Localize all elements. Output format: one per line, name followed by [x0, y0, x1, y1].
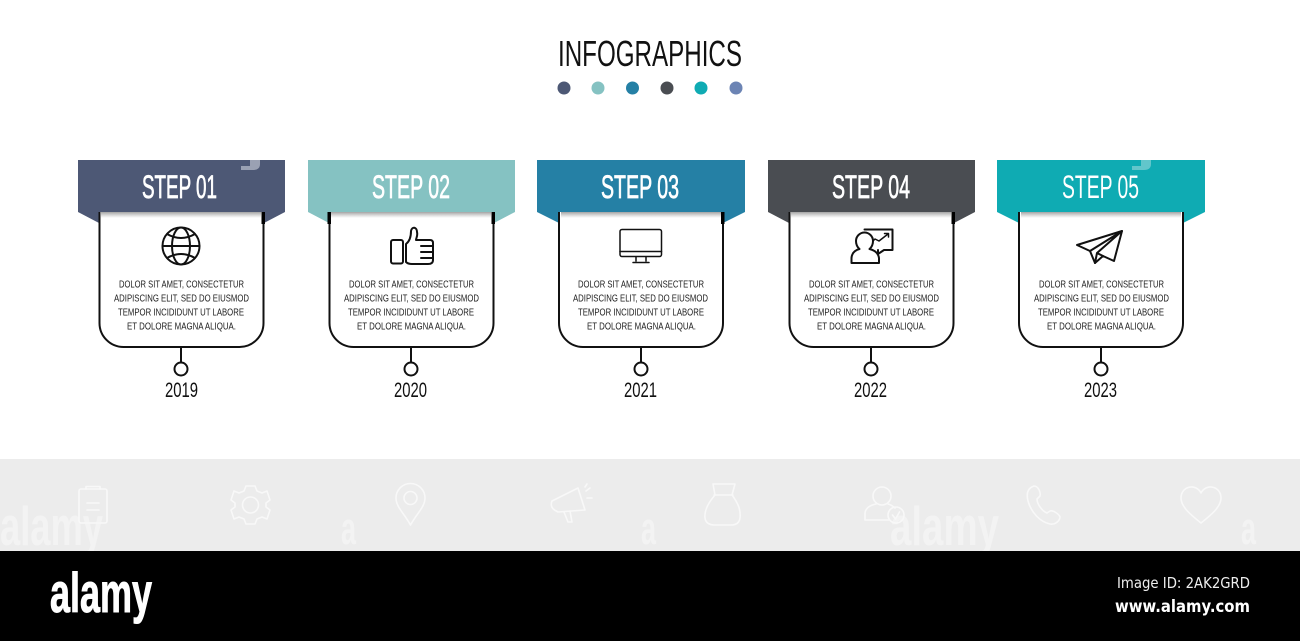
card tabs	[262, 212, 265, 224]
body text: ET DOLORE MAGNA ALIQUA.	[817, 322, 926, 332]
body text: ET DOLORE MAGNA ALIQUA.	[357, 322, 466, 332]
timeline marker	[1094, 347, 1108, 376]
header banner: step 02	[308, 160, 515, 223]
panel: step 03	[537, 160, 745, 402]
body text: ADIPISCING ELIT, SED DO EIUSMOD	[114, 294, 249, 304]
card background: step 05	[1019, 212, 1183, 347]
timeline marker	[174, 347, 188, 376]
body text: ET DOLORE MAGNA ALIQUA.	[127, 322, 236, 332]
logo: alamy: alamy	[50, 561, 152, 624]
card outline: step 05	[1019, 212, 1183, 347]
header banner: step 04	[768, 160, 975, 223]
panel: black footer bar	[0, 551, 1300, 641]
year: 2021	[624, 379, 657, 402]
body text: ADIPISCING ELIT, SED DO EIUSMOD	[1034, 294, 1169, 304]
icon: location pin	[396, 483, 425, 525]
card tabs	[721, 212, 724, 224]
body text	[573, 280, 708, 332]
watermark: alamy left: alamy	[0, 495, 103, 557]
body text: DOLOR SIT AMET, CONSECTETUR	[578, 280, 704, 290]
year: 2022	[854, 379, 887, 402]
body text: ADIPISCING ELIT, SED DO EIUSMOD	[804, 294, 939, 304]
body text: TEMPOR INCIDIDUNT UT LABORE	[808, 308, 934, 318]
card tabs	[328, 212, 495, 224]
image id: Image ID: 2AK2GRD	[1117, 574, 1250, 592]
body text: DOLOR SIT AMET, CONSECTETUR	[349, 280, 474, 290]
panel: step 05	[997, 160, 1205, 402]
heading: step 01: STEP 01	[142, 169, 217, 205]
panel: grey icon band	[0, 459, 1300, 557]
card shadow	[331, 212, 492, 218]
panel: step 02	[308, 160, 515, 402]
icon: presenter with chart	[852, 230, 892, 263]
card shadow	[1021, 212, 1181, 218]
heading: step 05: STEP 05	[1062, 169, 1139, 205]
card background: step 04	[790, 212, 954, 347]
card tabs	[952, 212, 955, 224]
colour dots	[558, 82, 742, 94]
watermark: a: a	[641, 503, 657, 554]
icon: thumbs up	[391, 228, 433, 264]
icon: clipboard	[79, 486, 107, 523]
body text: DOLOR SIT AMET, CONSECTETUR	[1039, 280, 1164, 290]
body text: TEMPOR INCIDIDUNT UT LABORE	[348, 308, 474, 318]
heading: step 04: STEP 04	[832, 169, 910, 205]
icon: megaphone	[551, 484, 592, 522]
icon: money bag	[705, 484, 740, 525]
body text: ET DOLORE MAGNA ALIQUA.	[587, 322, 696, 332]
body text: ADIPISCING ELIT, SED DO EIUSMOD	[344, 294, 479, 304]
header banner: step 03	[537, 160, 745, 223]
icon: monitor	[620, 230, 662, 262]
panel: step 01	[78, 160, 285, 402]
card shadow	[561, 212, 721, 218]
body text	[804, 280, 939, 332]
card outline: step 02	[330, 212, 494, 347]
body text	[1034, 280, 1169, 332]
body text: ADIPISCING ELIT, SED DO EIUSMOD	[573, 294, 708, 304]
timeline marker	[634, 347, 648, 376]
card outline: step 04	[790, 212, 954, 347]
heading: step 03: STEP 03	[601, 169, 679, 205]
body text	[114, 280, 249, 332]
watermark: a: a	[1241, 503, 1257, 554]
body text: DOLOR SIT AMET, CONSECTETUR	[809, 280, 934, 290]
card outline: step 03	[559, 212, 723, 347]
watermark fragment	[241, 160, 260, 170]
card background: step 03	[559, 212, 723, 347]
icon: gear	[231, 486, 270, 524]
icon: phone	[1027, 486, 1060, 524]
body text: ET DOLORE MAGNA ALIQUA.	[1047, 322, 1156, 332]
watermark: alamy right: alamy	[890, 495, 999, 557]
icon: user check	[865, 487, 904, 523]
panel: step 04	[768, 160, 975, 402]
year: 2023	[1084, 379, 1117, 402]
card shadow	[101, 212, 262, 218]
heading: step 02: STEP 02	[372, 169, 450, 205]
header banner: step 05	[997, 160, 1205, 223]
body text: TEMPOR INCIDIDUNT UT LABORE	[1038, 308, 1164, 318]
body text: TEMPOR INCIDIDUNT UT LABORE	[578, 308, 704, 318]
icon: heart	[1181, 487, 1221, 523]
watermark fragment	[1132, 160, 1151, 170]
icon: paper plane	[1077, 231, 1122, 263]
timeline marker	[864, 347, 878, 376]
card outline: step 01	[100, 212, 264, 347]
website url: www.alamy.com	[1115, 597, 1250, 616]
year: 2020	[394, 379, 427, 402]
card background: step 02	[330, 212, 494, 347]
card shadow	[791, 212, 952, 218]
icon: globe	[162, 228, 200, 264]
header banner: step 01	[78, 160, 285, 223]
year: 2019	[165, 379, 198, 402]
title: INFOGRAPHICS	[558, 33, 742, 74]
watermark: a: a	[341, 503, 357, 554]
card background: step 01	[100, 212, 264, 347]
body text	[344, 280, 479, 332]
body text: TEMPOR INCIDIDUNT UT LABORE	[118, 308, 244, 318]
body text: DOLOR SIT AMET, CONSECTETUR	[119, 280, 244, 290]
timeline marker	[404, 347, 418, 376]
